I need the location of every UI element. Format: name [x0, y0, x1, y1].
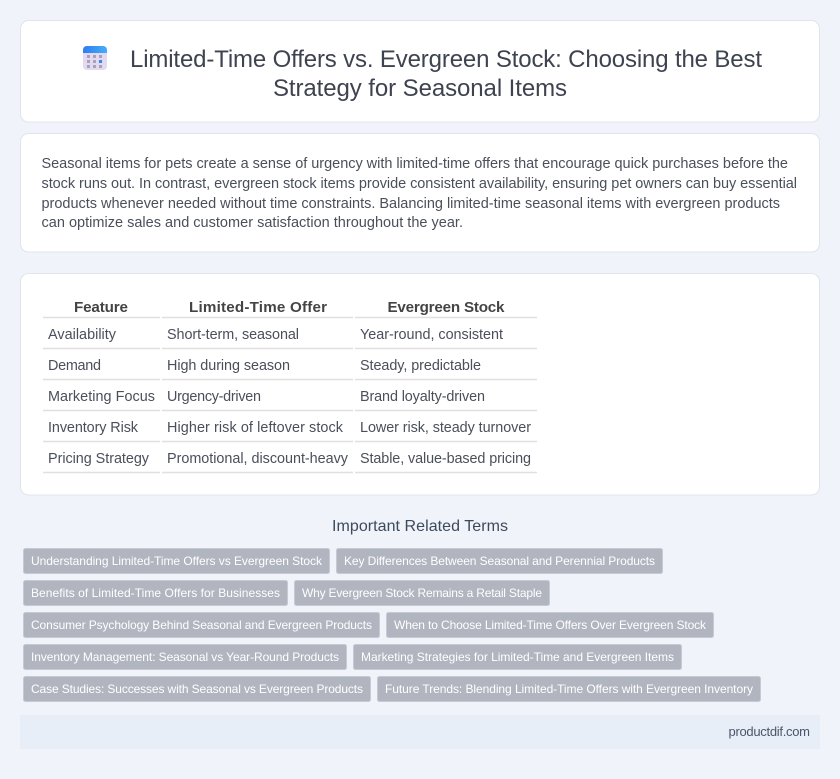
row: pricing strategy: Stable, value-based pricing [360, 451, 531, 467]
row: marketing focus [48, 389, 485, 405]
intro text: products whenever needed without time constraints. Balancing limited-time seasonal items with evergreen products [42, 196, 780, 212]
tags: related terms [24, 548, 760, 702]
row: demand: High during season [167, 358, 290, 374]
tag: Case Studies: Successes with Seasonal vs Evergreen Products [31, 682, 363, 696]
tag [24, 644, 346, 670]
title: Strategy for Seasonal Items [273, 75, 567, 102]
tag: Marketing Strategies for Limited-Time and Evergreen Items [361, 650, 674, 664]
tag [24, 676, 370, 702]
table header: Limited-Time Offer [189, 299, 327, 316]
tag [378, 676, 760, 702]
tag [24, 612, 380, 638]
row: inventory risk [48, 420, 531, 436]
tag: Understanding Limited-Time Offers vs Evergreen Stock [31, 554, 323, 568]
row: demand [48, 358, 481, 374]
row: availability [48, 327, 503, 343]
tag [24, 548, 330, 574]
row: demand: Steady, predictable [360, 358, 481, 374]
row: inventory risk: Lower risk, steady turnover [360, 420, 531, 436]
row: availability: Year-round, consistent [360, 327, 503, 343]
footer [20, 715, 820, 749]
row: marketing focus: Marketing Focus [48, 389, 155, 405]
row: availability: Short-term, seasonal [167, 327, 299, 343]
intro text: can optimize sales and customer satisfaction throughout the year. [42, 215, 463, 231]
row: pricing strategy: Pricing Strategy [48, 451, 150, 467]
icon: calendar [83, 46, 107, 70]
table header: Feature [74, 299, 128, 316]
tag: Inventory Management: Seasonal vs Year-Round Products [31, 650, 339, 664]
table header: Evergreen Stock [388, 299, 505, 316]
tag: Future Trends: Blending Limited-Time Offers with Evergreen Inventory [385, 682, 753, 696]
footer source text: productdif.com [728, 724, 810, 739]
tag [294, 580, 550, 606]
row: pricing strategy: Promotional, discount-heavy [167, 451, 349, 467]
intro text: stock runs out. In contrast, evergreen stock items provide consistent availability, ensuring pet owners can buy essential [42, 176, 797, 192]
row: marketing focus: Urgency-driven [167, 389, 261, 405]
tag [354, 644, 682, 670]
panel: comparison table [20, 274, 820, 495]
tag: Why Evergreen Stock Remains a Retail Staple [302, 586, 542, 600]
table header [74, 299, 505, 316]
tag [24, 580, 288, 606]
row: demand: Demand [48, 358, 101, 374]
tag: Key Differences Between Seasonal and Perennial Products [344, 554, 655, 568]
panel: intro paragraph [20, 134, 820, 252]
tag: Consumer Psychology Behind Seasonal and Evergreen Products [31, 618, 372, 632]
panel: title header [20, 20, 820, 122]
tag: Benefits of Limited-Time Offers for Businesses [31, 586, 280, 600]
tag [336, 548, 662, 574]
row: inventory risk: Higher risk of leftover stock [167, 420, 344, 436]
intro text: Seasonal items for pets create a sense of urgency with limited-time offers that encourage quick purchases before the [42, 156, 788, 172]
title: Limited-Time Offers vs. Evergreen Stock: Choosing the Best [130, 46, 762, 73]
heading: related terms: Important Related Terms [332, 518, 508, 535]
row: pricing strategy [48, 451, 531, 467]
row: marketing focus: Brand loyalty-driven [360, 389, 485, 405]
tag: When to Choose Limited-Time Offers Over Evergreen Stock [394, 618, 707, 632]
row: inventory risk: Inventory Risk [48, 420, 139, 436]
tag [386, 612, 714, 638]
row: availability: Availability [48, 327, 117, 343]
